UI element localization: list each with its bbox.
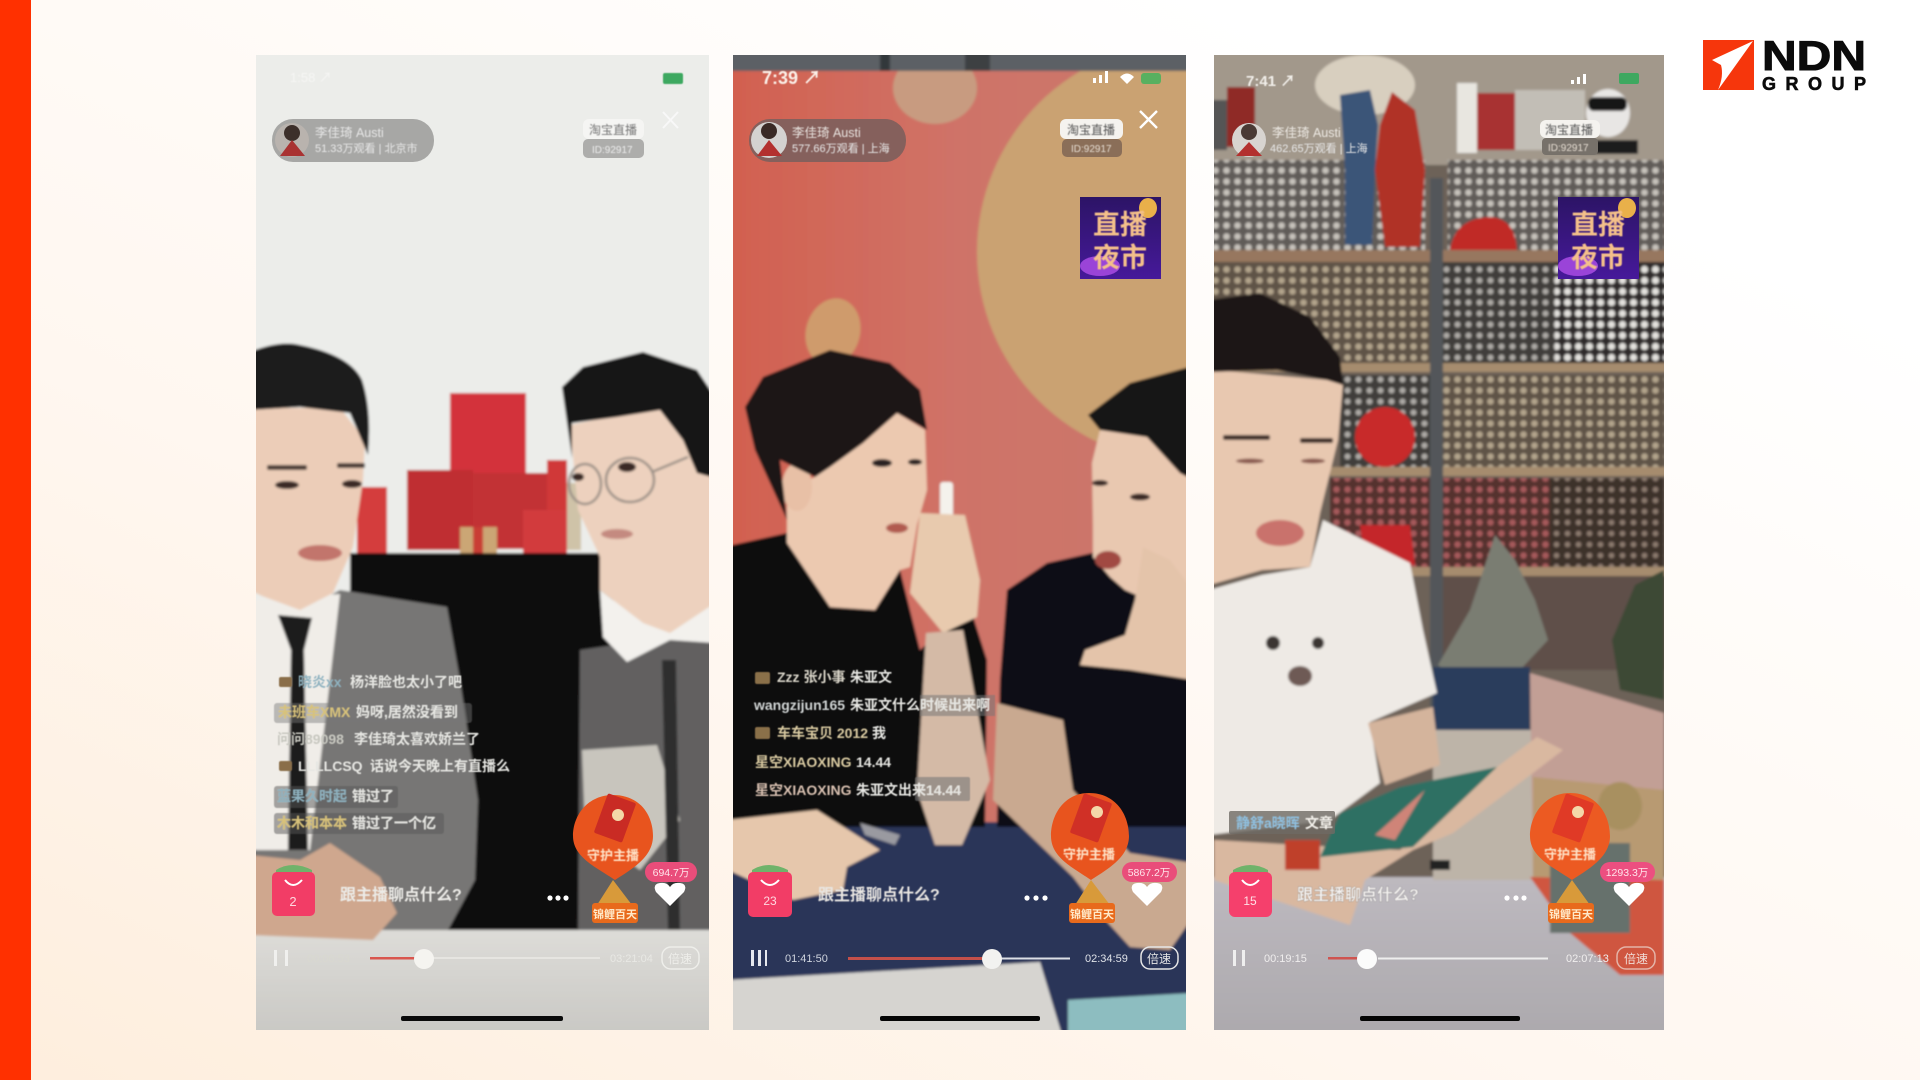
Taobao Live badge: 淘宝直播	[1067, 123, 1115, 137]
chat comments: Zzz 张小事	[777, 669, 845, 685]
playback controls	[274, 947, 699, 969]
chat comments: 木木和本本	[277, 815, 347, 831]
status bar	[290, 70, 683, 85]
status bar: 7:39 ↗	[762, 68, 821, 88]
Taobao Live badge	[583, 119, 644, 158]
chat prompt: 跟主播聊点什么?	[1297, 885, 1419, 904]
host pill: 李佳琦 Austi	[315, 125, 384, 140]
close icon	[1140, 111, 1157, 128]
close icon	[663, 112, 678, 128]
chat comments	[274, 674, 510, 834]
host avatar and name: 李佳琦 Austi	[1272, 125, 1341, 140]
Taobao Live badge: ID:92917	[1071, 144, 1112, 155]
chat comments: wangzijun165	[753, 697, 845, 713]
status bar	[762, 68, 1161, 88]
logo wordmark: NDN	[1762, 32, 1866, 79]
likes pill	[1600, 862, 1655, 882]
photo: host with dog in front of lipstick shelves	[1209, 50, 1670, 1040]
red side bar	[0, 0, 31, 1080]
status bar: 7:41 ↗	[1246, 73, 1295, 90]
likes pill	[1122, 862, 1177, 882]
playback controls: 00:19:15	[1264, 953, 1307, 965]
host pill: 51.33万观看 | 北京市	[315, 141, 418, 155]
Taobao Live badge	[1540, 120, 1600, 155]
night market badge: 直播	[1093, 210, 1147, 240]
more dots	[1504, 895, 1527, 901]
more dots	[547, 895, 569, 901]
guard-host balloon badge	[573, 793, 653, 923]
shopping bag icon	[1229, 865, 1272, 917]
likes pill: 5867.2万	[1128, 867, 1170, 879]
chat prompt: 跟主播聊点什么?	[818, 885, 940, 904]
chat comments: 妈呀,居然没看到	[356, 704, 458, 720]
chat comments: 晓炎xx	[298, 674, 342, 690]
host pill	[749, 119, 906, 162]
chat comments: 朱亚文什么时候出来啊	[850, 697, 990, 713]
chat comments: 星空XIAOXING	[755, 754, 852, 770]
Taobao Live badge: ID:92917	[1548, 143, 1589, 154]
logo mark	[1703, 40, 1754, 90]
night market badge: 夜市	[1093, 243, 1147, 273]
chat comment: 文章	[1305, 815, 1333, 831]
chat comments: 星空XIAOXING	[755, 782, 852, 798]
chat comments: 话说今天晚上有直播么	[370, 758, 510, 774]
photo: two hosts against red wall	[728, 42, 1397, 1037]
chat comments: 杨洋脸也太小了吧	[350, 674, 462, 690]
Taobao Live badge	[1060, 119, 1123, 157]
likes pill	[645, 862, 697, 882]
night market badge	[1080, 197, 1161, 279]
home indicator	[880, 1016, 1040, 1021]
chat comments: 蓝果久时起	[277, 788, 347, 804]
likes pill: 694.7万	[653, 867, 689, 879]
guard-host balloon badge: 锦鲤百天	[593, 907, 637, 921]
home indicator	[1360, 1016, 1520, 1021]
chat prompt: 跟主播聊点什么?	[340, 885, 462, 904]
panel: phone screenshot 3	[1214, 55, 1664, 1030]
panel: phone screenshot 2	[733, 55, 1186, 1030]
chat comments: 错过了	[352, 788, 394, 804]
chat comments: 14.44	[856, 754, 891, 770]
chat comments: 李佳琦太喜欢娇兰了	[354, 731, 480, 747]
chat comment: 静舒a晓晖	[1236, 815, 1300, 831]
chat comments: 未班车XMX	[278, 704, 351, 720]
chat comments: LLLLCSQ	[298, 758, 363, 774]
guard-host balloon badge: 锦鲤百天	[1549, 907, 1593, 921]
status bar	[1246, 73, 1639, 90]
chat comments: 朱亚文出来14.44	[856, 782, 961, 798]
chat comments: 我	[872, 725, 886, 741]
guard-host balloon badge: 守护主播	[1063, 847, 1115, 862]
host avatar and name: 462.65万观看 | 上海	[1270, 141, 1368, 155]
status bar: 1:58 ↗	[290, 70, 332, 85]
host pill	[272, 119, 434, 162]
playback controls: 倍速	[1147, 951, 1171, 966]
more dots	[1024, 895, 1048, 901]
heart icon	[1132, 883, 1162, 906]
playback controls	[751, 947, 1178, 969]
guard-host balloon badge: 锦鲤百天	[1070, 907, 1114, 921]
night market badge: 直播	[1571, 210, 1625, 240]
logo wordmark: GROUP	[1762, 74, 1866, 94]
guard-host balloon badge	[1530, 793, 1610, 923]
heart icon	[655, 883, 685, 906]
shopping bag icon	[272, 865, 315, 916]
host pill: 577.66万观看 | 上海	[792, 141, 890, 155]
night market badge: 夜市	[1571, 243, 1625, 273]
chat comments: 问问89098	[277, 731, 344, 747]
playback controls: 01:41:50	[785, 953, 828, 965]
shopping bag icon: 2	[289, 894, 297, 909]
playback controls: 倍速	[668, 951, 692, 966]
home indicator	[401, 1016, 563, 1021]
chat comments: 错过了一个亿	[352, 815, 436, 831]
Taobao Live badge: ID:92917	[592, 145, 633, 156]
night market badge	[1558, 197, 1639, 279]
heart icon	[1614, 883, 1644, 906]
playback controls: 03:21:04	[610, 953, 653, 965]
logo: NDN Group	[1703, 32, 1866, 94]
host pill: 李佳琦 Austi	[792, 125, 861, 140]
logo wordmark	[1762, 32, 1866, 94]
chat comments	[753, 669, 995, 801]
shopping bag icon	[748, 865, 792, 917]
photo: two hosts with red gift boxes	[250, 50, 720, 1035]
host avatar and name	[1232, 123, 1368, 157]
Taobao Live badge: 淘宝直播	[1545, 123, 1593, 137]
playback controls: 02:07:13	[1566, 953, 1609, 965]
playback controls	[1233, 947, 1655, 969]
guard-host balloon badge	[1051, 793, 1129, 923]
playback controls: 02:34:59	[1085, 953, 1128, 965]
chat comment	[1229, 811, 1335, 834]
playback controls: 00:06:53	[307, 953, 350, 965]
shopping bag icon: 15	[1243, 894, 1257, 908]
panel: phone screenshot 1	[256, 55, 709, 1030]
guard-host balloon badge: 守护主播	[587, 848, 639, 863]
Taobao Live badge: 淘宝直播	[589, 123, 637, 137]
playback controls: 倍速	[1624, 951, 1648, 966]
chat comments: 车车宝贝 2012	[777, 725, 868, 741]
likes pill: 1293.3万	[1606, 867, 1648, 879]
guard-host balloon badge: 守护主播	[1544, 847, 1596, 862]
shopping bag icon: 23	[763, 894, 777, 908]
chat comments: 朱亚文	[850, 669, 892, 685]
